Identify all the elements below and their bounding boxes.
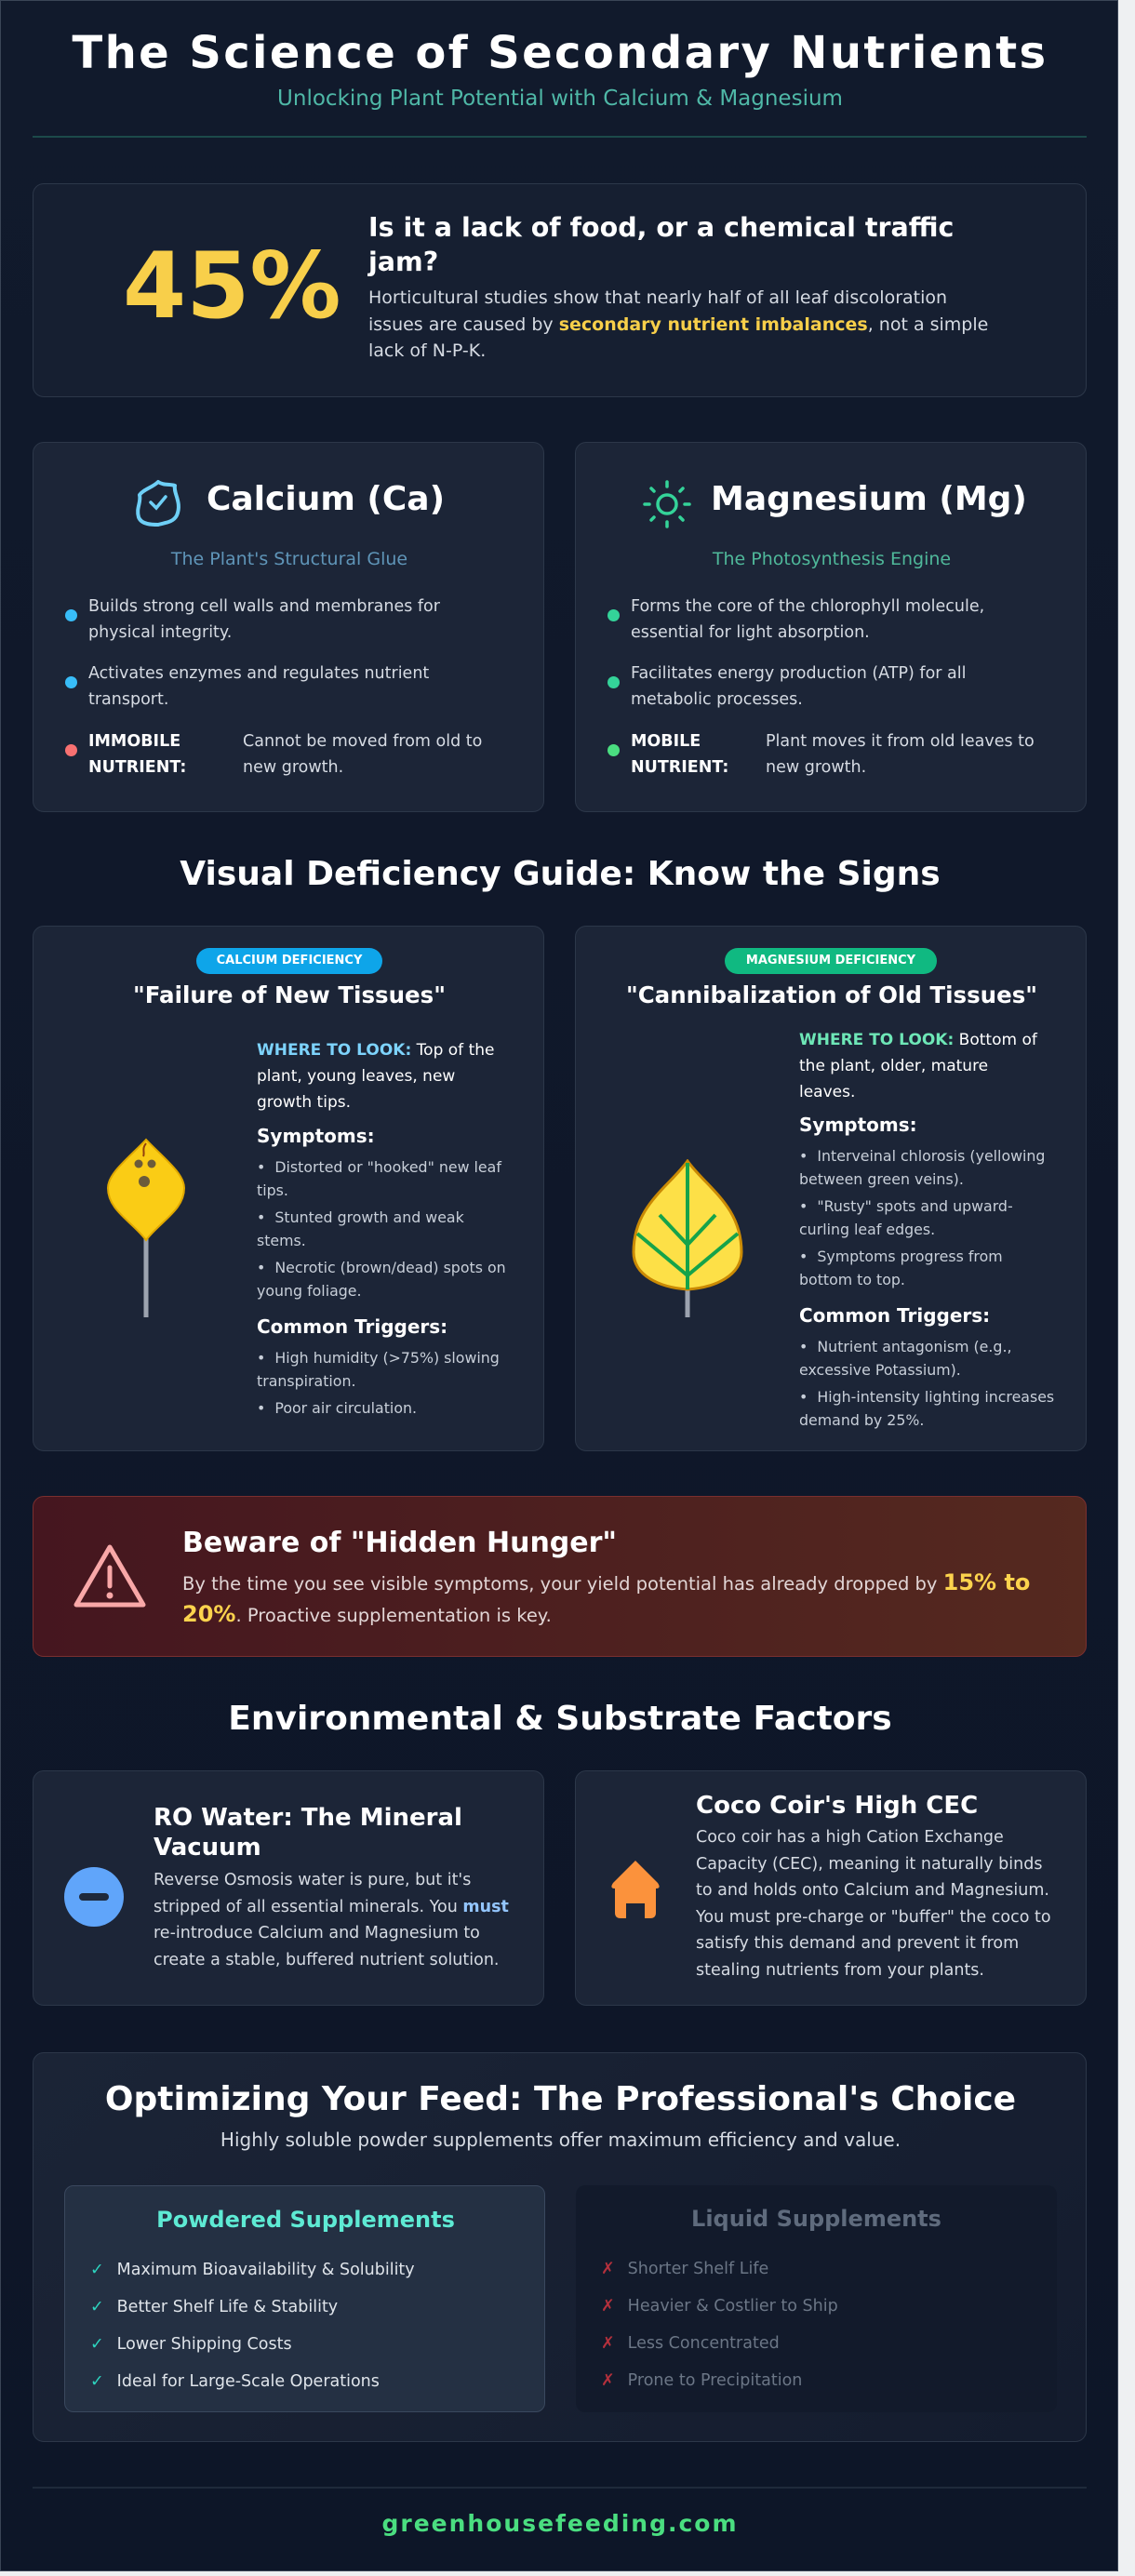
heading: visual guide: Visual Deficiency Guide: Know the Signs <box>180 855 941 893</box>
panel: coco coir <box>575 1770 1087 2006</box>
title: The Science of Secondary Nutrients <box>72 27 1048 79</box>
badge: CALCIUM DEFICIENCY <box>217 954 362 968</box>
subtitle: The Photosynthesis Engine <box>713 549 951 569</box>
callout: hidden hunger <box>33 1496 1087 1657</box>
symptoms: • Interveinal chlorosis (yellowing between green veins). <box>799 1147 1045 1188</box>
footer: greenhousefeeding.com <box>381 2510 739 2537</box>
icon: shield <box>136 480 180 527</box>
badge <box>196 948 382 974</box>
symptoms: Symptoms: <box>257 1125 375 1147</box>
bullets: Cannot be moved from old to new growth. <box>243 732 482 777</box>
box: powdered: Powdered Supplements <box>156 2207 455 2233</box>
bullets: Builds strong cell walls and membranes for physical integrity. <box>88 597 440 642</box>
triggers: • High-intensity lighting increases demand by 25%. <box>799 1388 1054 1429</box>
bullets <box>608 597 1035 777</box>
heading: Magnesium (Mg) <box>711 480 1027 518</box>
symptoms <box>257 1125 506 1300</box>
bullets: Activates enzymes and regulates nutrient transport. <box>88 664 429 709</box>
box: powdered: ✓ Lower Shipping Costs <box>90 2335 292 2354</box>
icon: calcium leaf <box>107 1139 185 1317</box>
triggers: • Poor air circulation. <box>257 1399 417 1417</box>
text: Coco coir has a high Cation Exchange Capacity (CEC), meaning it naturally binds to and holds onto Calcium and Magnesium. You must pre-charge or "buffer" the coco to satisfy this demand and prevent it from stealing nutrients from your plants. <box>696 1828 1051 1980</box>
triggers: Common Triggers: <box>257 1315 447 1338</box>
bullets: Forms the core of the chlorophyll molecule, essential for light absorption. <box>631 597 984 642</box>
panel: RO water <box>33 1770 544 2006</box>
box: liquid: Liquid Supplements <box>691 2206 941 2232</box>
heading: Optimizing Your Feed: The Professional's Choice <box>105 2080 1016 2118</box>
triggers: • Nutrient antagonism (e.g., excessive Potassium). <box>799 1338 1011 1379</box>
panel: stat <box>33 183 1087 397</box>
panel: optimizing feed <box>33 2052 1087 2442</box>
badge: MAGNESIUM DEFICIENCY <box>746 954 915 968</box>
box: liquid <box>576 2185 1057 2412</box>
panel: calcium <box>33 442 544 812</box>
stat heading: Is it a lack of food, or a chemical traffic jam? <box>368 212 954 277</box>
stat number: 45% <box>123 234 341 340</box>
heading: Calcium (Ca) <box>207 480 445 518</box>
text: where to look: WHERE TO LOOK: Top of the plant, young leaves, new growth tips. <box>257 1041 494 1112</box>
text: By the time you see visible symptoms, your yield potential has already dropped by 15% to 20%. Proactive supplementation is key. <box>182 1569 1030 1627</box>
badge <box>725 948 937 974</box>
icon: magnesium leaf <box>633 1159 742 1317</box>
triggers <box>799 1304 1054 1429</box>
box: powdered: ✓ Ideal for Large-Scale Operations <box>90 2372 380 2391</box>
box: liquid: ✗ Heavier & Costlier to Ship <box>601 2297 838 2316</box>
text: Reverse Osmosis water is pure, but it's stripped of all essential minerals. You must re-introduce Calcium and Magnesium to create a stable, buffered nutrient solution. <box>154 1871 509 1969</box>
icon: house <box>611 1861 660 1918</box>
text: where to look: WHERE TO LOOK: Bottom of the plant, older, mature leaves. <box>799 1031 1037 1101</box>
icon: warning <box>74 1544 145 1608</box>
bullets <box>65 597 482 777</box>
symptoms: • Symptoms progress from bottom to top. <box>799 1248 1003 1288</box>
bullets: MOBILE NUTRIENT: <box>631 732 728 777</box>
icon: minus circle <box>64 1867 124 1927</box>
bullets: Facilitates energy production (ATP) for all metabolic processes. <box>631 664 967 709</box>
title: "Failure of New Tissues" <box>133 981 446 1008</box>
symptoms: Symptoms: <box>799 1114 917 1136</box>
panel: magnesium <box>575 442 1087 812</box>
icon: sun <box>643 480 691 528</box>
box: liquid: ✗ Less Concentrated <box>601 2334 780 2353</box>
triggers <box>257 1315 500 1417</box>
symptoms: • Distorted or "hooked" new leaf tips. <box>257 1158 501 1199</box>
box: powdered: ✓ Maximum Bioavailability & Solubility <box>90 2261 415 2279</box>
heading: Coco Coir's High CEC <box>696 1792 978 1820</box>
heading: RO Water: The Mineral Vacuum <box>154 1804 462 1862</box>
title: "Cannibalization of Old Tissues" <box>626 981 1037 1008</box>
triggers: • High humidity (>75%) slowing transpiration. <box>257 1349 500 1390</box>
symptoms: • "Rusty" spots and upward-curling leaf edges. <box>799 1197 1013 1238</box>
box: powdered <box>64 2185 545 2412</box>
box: powdered: ✓ Better Shelf Life & Stability <box>90 2298 338 2316</box>
heading: environmental: Environmental & Substrate Factors <box>228 1700 892 1738</box>
panel: magnesium deficiency <box>575 926 1087 1451</box>
stat text: Horticultural studies show that nearly half of all leaf discoloration issues are caused by secondary nutrient imbalances, not a simple lack of N-P-K. <box>368 287 988 361</box>
panel: calcium deficiency <box>33 926 544 1451</box>
symptoms <box>799 1114 1045 1288</box>
triggers: Common Triggers: <box>799 1304 990 1327</box>
symptoms: • Necrotic (brown/dead) spots on young foliage. <box>257 1259 506 1300</box>
subtitle: Unlocking Plant Potential with Calcium & Magnesium <box>277 87 843 111</box>
bullets: IMMOBILE NUTRIENT: <box>88 732 186 777</box>
subtitle: Highly soluble powder supplements offer maximum efficiency and value. <box>220 2129 901 2151</box>
subtitle: The Plant's Structural Glue <box>171 549 407 569</box>
bullets: Plant moves it from old leaves to new growth. <box>766 732 1035 777</box>
box: liquid: ✗ Shorter Shelf Life <box>601 2260 768 2278</box>
box: liquid: ✗ Prone to Precipitation <box>601 2371 802 2390</box>
heading: Beware of "Hidden Hunger" <box>182 1527 617 1559</box>
symptoms: • Stunted growth and weak stems. <box>257 1208 464 1249</box>
